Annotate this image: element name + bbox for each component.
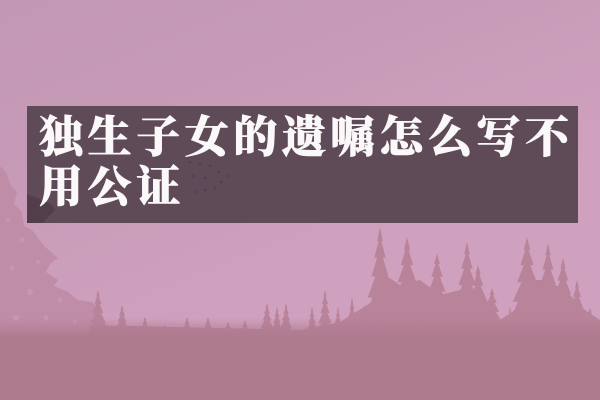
ground haze xyxy=(0,318,600,338)
title: 独生子女的遗嘱怎么写不用公证 xyxy=(39,113,574,212)
treeline left xyxy=(86,290,300,345)
large tree on left xyxy=(0,166,110,345)
title banner xyxy=(27,106,578,223)
treeline right xyxy=(300,227,600,345)
banner overlay: tree shadow and birds xyxy=(27,160,228,223)
ground xyxy=(0,337,600,400)
